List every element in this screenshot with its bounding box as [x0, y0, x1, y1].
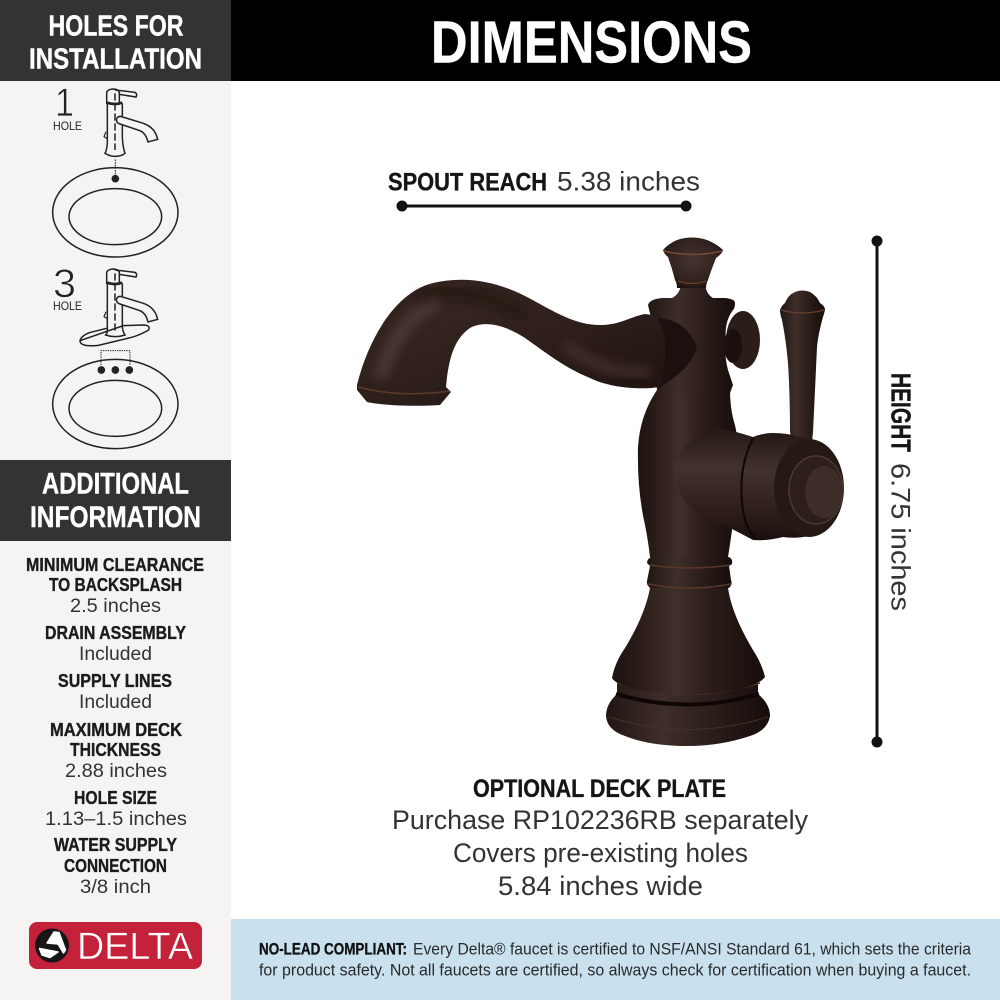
- list: additional information specs: [26, 555, 204, 898]
- spec: maximum deck thickness: [50, 720, 182, 782]
- dimension: height: [872, 236, 916, 748]
- text: no-lead compliant note: NO-LEAD COMPLIANT:: [259, 940, 407, 958]
- faucet: base flange: [606, 683, 770, 746]
- spec: water supply connection: CONNECTION: [64, 856, 167, 876]
- dimension: spout reach: [388, 166, 700, 212]
- panel: additional information header: [0, 460, 231, 541]
- logo: delta: [29, 922, 202, 969]
- text: height label: HEIGHT: [886, 373, 916, 452]
- heading: holes for installation: HOLES FOR: [48, 10, 184, 42]
- product image: oil-rubbed bronze faucet: [357, 238, 844, 746]
- spec: supply lines: SUPPLY LINES: [58, 671, 172, 691]
- text: optional deck plate note: Covers pre-existing holes: [453, 838, 748, 868]
- heading: additional information: [30, 468, 201, 534]
- label: 1 hole: HOLE: [53, 119, 82, 133]
- text: spout reach label: SPOUT REACH: [388, 168, 547, 196]
- text: optional deck plate note: Purchase RP102236RB separately: [392, 805, 808, 835]
- spec: minimum clearance to backsplash: MINIMUM CLEARANCE: [26, 555, 204, 575]
- panel: holes for installation header: [0, 0, 231, 81]
- spec: supply lines: [58, 671, 172, 713]
- faucet: top finial: [663, 238, 723, 288]
- diagram: one hole sink installation: [53, 81, 178, 257]
- faucet: collar band: [647, 557, 732, 588]
- text: optional deck plate note: 5.84 inches wide: [498, 871, 703, 901]
- spec: hole size: HOLE SIZE: [74, 788, 157, 808]
- heading: additional information: INFORMATION: [30, 501, 201, 534]
- spec: water supply connection: WATER SUPPLY: [54, 835, 177, 855]
- label: 3 hole: HOLE: [53, 299, 82, 313]
- diagram: three hole sink installation: [53, 262, 178, 449]
- panel: no-lead compliant footer: [231, 919, 1000, 1000]
- spec: hole size: [45, 788, 187, 830]
- text: no-lead compliant note: Every Delta® faucet is certified to NSF/ANSI Standard 61, which sets the criteria: [413, 940, 972, 958]
- spec: maximum deck thickness: MAXIMUM DECK: [50, 720, 182, 740]
- spec: minimum clearance to backsplash: 2.5 inches: [70, 596, 161, 617]
- icon: single hole faucet and sink: [53, 89, 178, 257]
- panel: left sidebar background: [0, 0, 231, 1000]
- spec: drain assembly: DRAIN ASSEMBLY: [45, 623, 186, 643]
- heading: holes for installation: [29, 10, 202, 76]
- text: height label: 6.75 inches: [886, 463, 916, 611]
- spec: supply lines: Included: [79, 692, 152, 713]
- faucet: main body: [638, 390, 738, 557]
- spec: maximum deck thickness: 2.88 inches: [65, 761, 167, 782]
- label: 1 hole: [53, 81, 82, 133]
- arrow: spout reach measure line: [396, 200, 692, 212]
- panel: dimensions header: [231, 0, 1000, 81]
- text: no-lead compliant note: [259, 940, 972, 980]
- logo: delta: DELTA: [77, 926, 194, 968]
- faucet: handle hub: [673, 428, 844, 540]
- label: 3 hole: 3: [53, 262, 76, 306]
- text: optional deck plate note: OPTIONAL DECK PLATE: [473, 775, 726, 803]
- spec: drain assembly: Included: [79, 644, 152, 665]
- spec: drain assembly: [45, 623, 186, 665]
- spec: water supply connection: [54, 835, 177, 898]
- text: height label: [886, 373, 916, 611]
- text: optional deck plate note: [392, 775, 808, 901]
- label: 3 hole: [53, 262, 82, 313]
- faucet: lower cone: [612, 588, 765, 694]
- spec: minimum clearance to backsplash: TO BACKSPLASH: [49, 575, 182, 595]
- spec: maximum deck thickness: THICKNESS: [70, 740, 161, 760]
- faucet: rear knob: [724, 311, 760, 369]
- spec: minimum clearance to backsplash: [26, 555, 204, 617]
- arrow: height measure line: [872, 236, 882, 748]
- title: dimensions: DIMENSIONS: [431, 10, 752, 76]
- text: spout reach label: 5.38 inches: [557, 166, 700, 196]
- spec: hole size: 1.13–1.5 inches: [45, 809, 187, 830]
- icon: three hole faucet, deck plate and sink: [53, 269, 178, 449]
- text: spout reach label: [388, 166, 700, 196]
- faucet: lever handle: [780, 290, 825, 450]
- faucet: spout arc: [357, 280, 697, 406]
- label: 1 hole: 1: [55, 81, 74, 125]
- faucet: neck and collar: [648, 284, 735, 396]
- heading: holes for installation: INSTALLATION: [29, 44, 202, 76]
- heading: additional information: ADDITIONAL: [42, 468, 189, 500]
- spec: water supply connection: 3/8 inch: [80, 877, 151, 898]
- text: no-lead compliant note: for product safety. Not all faucets are certified, so always check for certification when buying a faucet.: [259, 962, 971, 980]
